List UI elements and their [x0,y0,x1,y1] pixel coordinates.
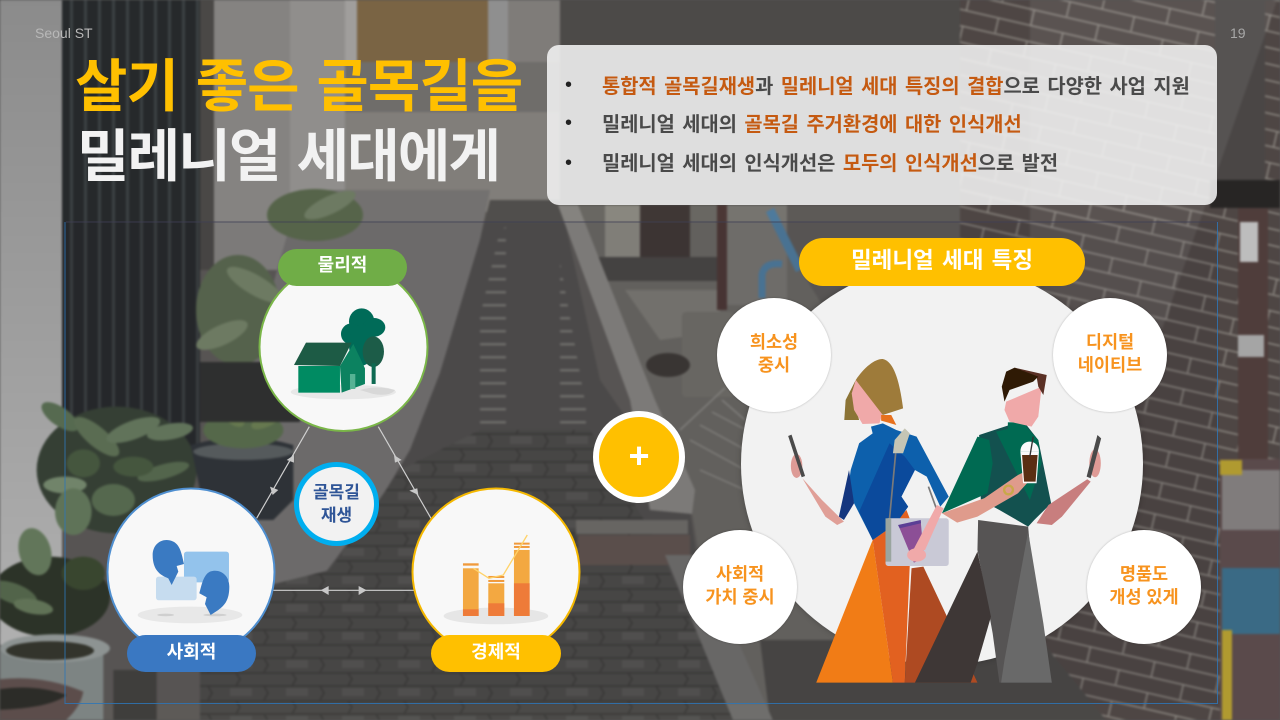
dark door [62,0,200,450]
woman face [852,380,883,424]
lane dark pavers [200,200,720,720]
large backdrop circle [741,263,1143,665]
trait: luxury with individuality [1087,530,1201,644]
trait: luxury with individuality: 명품도 [1120,564,1168,584]
bullet point 2: 밀레니얼 세대의 골목길 주거환경에 대한 인식개선 [602,114,1022,136]
man torso [979,425,1051,527]
title [75,55,522,189]
trait: digital native [1053,298,1167,412]
woman skirt [816,540,893,683]
left wall [0,0,62,645]
icon: house and trees [291,308,396,399]
circle: economic [412,488,580,656]
trait: luxury with individuality: 개성 있게 [1109,587,1179,607]
center badge: alley regeneration: 재생 [321,506,352,525]
woman hair [856,359,903,415]
pot with plant [191,437,293,520]
label: social: 사회적 [167,642,216,662]
icon: speech bubbles [138,540,242,623]
connector arrow: social to economic [273,586,415,595]
woman back hair [844,380,859,420]
man face [1004,387,1042,427]
bullet point 1: 통합적 골목길재생과 밀레니얼 세대 특징의 결합으로 다양한 사업 지원 [602,76,1190,98]
connector arrow: physical to social [257,427,309,518]
circle: physical [260,263,428,431]
label: physical: 물리적 [318,255,367,275]
right sidewalk and building [575,205,1030,720]
trait: social value: 가치 중시 [705,587,775,607]
lower wash [62,222,1218,704]
bullet point 1: • [565,74,572,96]
street pole [1210,0,1280,720]
bullet point 2: • [565,112,572,134]
manhole pad [576,520,688,534]
curb upper [558,205,695,514]
woman torso [849,423,949,540]
wire cart [680,388,765,490]
label: social [127,635,256,672]
trait: scarcity: 중시 [758,355,790,375]
trait: scarcity: 희소성 [750,332,798,352]
upper objects [605,205,640,260]
plants [0,397,293,720]
label: physical [278,249,407,286]
upper plants [192,185,363,422]
icon: bar chart [444,535,548,624]
paver ticks [470,205,590,430]
header label: Seoul ST [35,25,93,41]
overlay triangle accent [1030,0,1279,335]
label: economic [431,635,561,672]
bullet point 3: • [565,152,572,174]
brick wall [960,0,1280,720]
trait: digital native: 네이티브 [1078,355,1142,375]
center badge: alley regeneration [294,462,379,546]
title: 살기 좋은 골목길을 [75,55,522,119]
trait: scarcity [717,298,831,412]
bag [890,453,937,518]
lane light band [200,190,490,600]
heading pill: millennial traits [799,238,1085,286]
center badge: alley regeneration: 골목길 [313,483,360,502]
heading pill: millennial traits: 밀레니얼 세대 특징 [851,248,1033,273]
coffee cup [1020,442,1039,452]
lower pavers [200,430,740,720]
trait: social value: 사회적 [716,564,764,584]
man arms and phone [942,470,1032,523]
label: economic: 경제적 [471,642,521,662]
woman arm and phone [802,478,844,525]
circle: social [108,488,274,656]
woman lower arm [913,505,944,550]
bullet point 3: 밀레니얼 세대의 인식개선은 모두의 인식개선으로 발전 [602,153,1058,175]
panel: key points [547,45,1217,205]
plus icon: + [628,435,650,476]
illustration: woman and man [788,359,1101,683]
trait: social value [683,530,797,644]
man hair [1015,368,1047,395]
curb lower [665,555,775,720]
title: 밀레니얼 세대에게 [77,125,499,189]
plus icon [593,411,685,503]
wooden door and step [357,0,490,62]
connector arrow: physical to economic [378,427,431,518]
white pot [0,647,103,720]
trait: digital native: 디지털 [1086,332,1134,352]
page number: 19 [1230,25,1246,41]
man trousers [977,520,1052,683]
house wall [200,0,290,270]
